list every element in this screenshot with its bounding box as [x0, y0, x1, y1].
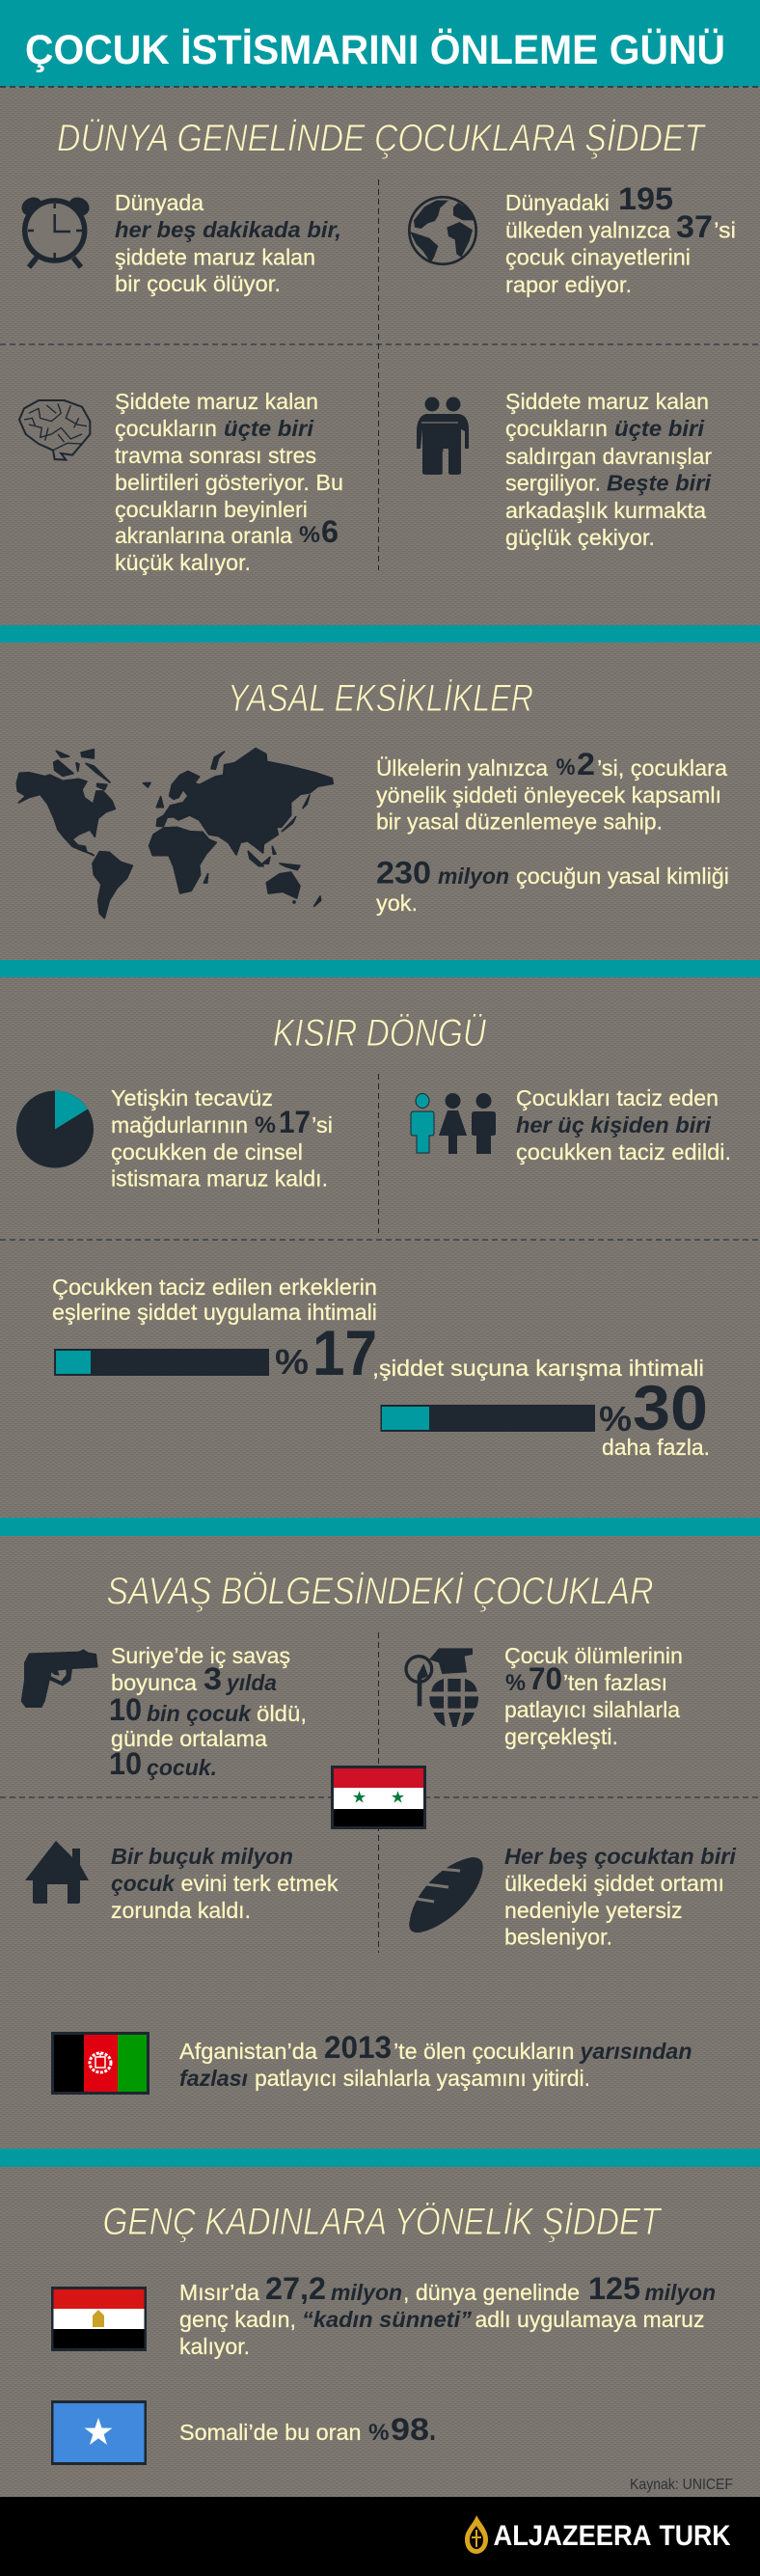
- text: Syria deaths: yılda: [226, 1670, 277, 1695]
- text: explosive weapons: ’ten fazlası: [563, 1670, 667, 1695]
- icon: two friends: [417, 397, 469, 475]
- bar chart: 30 percent: 30: [633, 1372, 708, 1443]
- text: one of three abusers: [516, 1085, 731, 1165]
- panel: vicious cycle: [0, 1012, 760, 1460]
- text: legal regulation: [376, 747, 728, 834]
- text: rape victims: 17: [279, 1105, 311, 1139]
- text: malnutrition: ülkedeki şiddet ortamı: [504, 1871, 724, 1896]
- text: Egypt FGM: [179, 2271, 716, 2359]
- text: more: daha fazla.: [602, 1435, 710, 1460]
- text: 37 of 195 countries: Dünyadaki: [505, 190, 610, 215]
- bar chart: 30 percent: %: [599, 1399, 632, 1439]
- footer: [0, 2497, 760, 2576]
- text: explosive weapons: %: [505, 1670, 526, 1696]
- text: Syria deaths: 10: [109, 1746, 142, 1781]
- text: Syria deaths: bin çocuk: [147, 1701, 253, 1726]
- text: one third aggressive: üçte biri: [614, 416, 704, 441]
- pie chart 17 percent: [16, 1090, 94, 1167]
- text: one third aggressive: güçlük çekiyor.: [505, 525, 655, 550]
- text: explosive weapons: 70: [529, 1661, 562, 1696]
- text: 230 million: çocuğun yasal kimliği: [516, 863, 729, 889]
- icon: alarm clock: [18, 194, 93, 267]
- panel: legal gaps: [16, 677, 729, 918]
- text: abused men intro: Çocukken taciz edilen erkeklerin: [52, 1274, 377, 1300]
- flag: Somalia: [51, 2400, 147, 2465]
- header banner: [0, 0, 760, 87]
- text: Afghanistan deaths: Afganistan’da: [179, 2039, 318, 2064]
- panel: children in war zones: [0, 1571, 760, 2095]
- bar chart: 17 percent: %: [275, 1342, 309, 1382]
- text: Egypt FGM: genç kadın,: [179, 2307, 296, 2332]
- heading: vicious cycle: KISIR DÖNGÜ: [273, 1012, 487, 1055]
- flag: Afghanistan: [51, 2032, 149, 2095]
- text: 37 of 195 countries: rapor ediyor.: [505, 272, 632, 297]
- world map: [16, 749, 333, 918]
- text: one third trauma: çocukların: [115, 416, 217, 441]
- text: rape victims: çocukken de cinsel: [111, 1139, 303, 1165]
- text: one third aggressive: sergiliyor.: [505, 471, 601, 496]
- text: displaced children: çocuk: [111, 1871, 176, 1896]
- flag: Syria: [331, 1766, 426, 1829]
- heading: young women: GENÇ KADINLARA YÖNELİK ŞİDDET: [102, 2201, 663, 2243]
- text: one third trauma: 6: [321, 514, 339, 549]
- text: one third trauma: %: [299, 522, 320, 548]
- band: section divider 3: [0, 1518, 760, 1536]
- text: legal regulation: %: [556, 754, 575, 781]
- text: 37 of 195 countries: çocuk cinayetlerini: [505, 245, 691, 270]
- text: Syria deaths: 10: [109, 1692, 142, 1727]
- text: Egypt FGM: adlı uygulamaya maruz: [475, 2307, 704, 2332]
- text: malnutrition: besleniyor.: [504, 1924, 612, 1949]
- logo: Al Jazeera Turk: ALJAZEERA: [494, 2520, 652, 2552]
- text: Egypt FGM: 27,2: [265, 2271, 326, 2306]
- text: one third aggressive: çocukların: [505, 416, 608, 441]
- icon: pistol: [21, 1649, 98, 1708]
- text: Syria deaths: Suriye’de iç savaş: [111, 1643, 290, 1668]
- text: one of three abusers: çocukken taciz edildi.: [516, 1139, 731, 1165]
- icon: globe: [409, 197, 476, 264]
- source note: Kaynak: UNICEF: [630, 2477, 733, 2493]
- text: rape victims: %: [255, 1112, 276, 1138]
- text: Egypt FGM: 125: [588, 2271, 640, 2306]
- text: Somalia rate: [179, 2412, 436, 2447]
- text: Egypt FGM: milyon: [644, 2280, 716, 2305]
- panel: violence against young women: [51, 2201, 733, 2493]
- text: explosive weapons: patlayıcı silahlarla: [504, 1697, 681, 1722]
- text: legal regulation: bir yasal düzenlemeye sahip.: [376, 808, 663, 834]
- text: Afghanistan deaths: fazlası: [179, 2066, 248, 2091]
- text: Syria deaths: öldü,: [257, 1701, 307, 1726]
- icon: three people: [411, 1093, 496, 1154]
- text: one third trauma: Şiddete maruz kalan: [115, 389, 318, 414]
- text: Afghanistan deaths: 2013: [324, 2030, 392, 2065]
- text: every five minutes: bir çocuk ölüyor.: [115, 271, 281, 296]
- text: rape victims: mağdurlarının: [111, 1112, 248, 1137]
- text: abused men intro: [52, 1274, 377, 1325]
- icon: brain: [19, 400, 90, 460]
- text: legal regulation: yönelik şiddeti önleyecek kapsamlı: [376, 782, 721, 808]
- text: Somalia rate: Somali’de bu oran: [179, 2420, 361, 2445]
- band: section divider 4: [0, 2149, 760, 2167]
- icon: grenade: [406, 1648, 478, 1727]
- text: displaced children: Bir buçuk milyon: [111, 1844, 293, 1869]
- text: Somalia rate: %: [368, 2420, 390, 2446]
- text: every five minutes: her beş dakikada bir,: [115, 217, 341, 242]
- logo: Al Jazeera Turk: [465, 2515, 731, 2554]
- text: 230 million: 230: [376, 855, 431, 890]
- text: every five minutes: şiddete maruz kalan: [115, 245, 315, 270]
- heading: legal gaps: YASAL EKSİKLİKLER: [228, 677, 533, 720]
- text: legal regulation: Ülkelerin yalnızca: [376, 755, 549, 781]
- text: one of three abusers: her üç kişiden biri: [516, 1112, 711, 1137]
- text: one third aggressive: Şiddete maruz kalan: [505, 389, 709, 414]
- text: Syria deaths: 3: [204, 1661, 222, 1696]
- flag: Syria: ★: [391, 1789, 405, 1808]
- logo: Al Jazeera Turk: TURK: [660, 2520, 731, 2552]
- text: displaced children: zorunda kaldı.: [111, 1898, 251, 1923]
- text: rape victims: [111, 1085, 333, 1191]
- text: 37 of 195 countries: 195: [618, 181, 673, 216]
- text: one third trauma: akranlarına oranla: [115, 523, 293, 548]
- text: Egypt FGM: milyon: [331, 2280, 402, 2305]
- text: every five minutes: Dünyada: [115, 190, 204, 215]
- text: malnutrition: [504, 1844, 736, 1949]
- text: Afghanistan deaths: [179, 2030, 692, 2091]
- text: rape victims: ’si: [312, 1112, 333, 1137]
- title: ÇOCUK İSTİSMARINI ÖNLEME GÜNÜ: [25, 27, 725, 73]
- text: one third aggressive: arkadaşlık kurmakta: [505, 498, 707, 523]
- text: malnutrition: nedeniyle yetersiz: [504, 1898, 683, 1923]
- text: one of three abusers: Çocukları taciz eden: [516, 1085, 719, 1110]
- text: displaced children: evini terk etmek: [181, 1871, 339, 1896]
- text: legal regulation: 2: [577, 747, 595, 781]
- text: one third aggressive: saldırgan davranışlar: [505, 444, 712, 469]
- text: Syria deaths: [109, 1643, 307, 1781]
- flag: Syria: ★: [352, 1789, 366, 1808]
- text: Syria deaths: çocuk.: [147, 1755, 217, 1780]
- text: 230 million: yok.: [376, 891, 418, 916]
- text: one third trauma: çocukların beyinleri: [115, 497, 308, 522]
- panel: world violence against children: [0, 118, 760, 575]
- text: explosive weapons: [504, 1643, 683, 1749]
- text: one third aggressive: Beşte biri: [607, 471, 711, 496]
- text: one third trauma: [115, 389, 343, 575]
- text: displaced children: [111, 1844, 339, 1923]
- bar chart: 30 percent: [380, 1372, 708, 1443]
- band: section divider 1: [0, 625, 760, 643]
- text: rape victims: istismara maruz kaldı.: [111, 1165, 328, 1191]
- text: Somalia rate: 98: [391, 2412, 429, 2447]
- text: Afghanistan deaths: ’te ölen çocukların: [394, 2039, 575, 2064]
- text: explosive weapons: gerçekleşti.: [504, 1724, 618, 1749]
- text: Somalia rate: .: [429, 2412, 436, 2447]
- text: 37 of 195 countries: 37: [676, 209, 713, 244]
- text: one third aggressive: [505, 389, 712, 550]
- text: Egypt FGM: “kadın sünneti”: [302, 2307, 472, 2332]
- text: Afghanistan deaths: yarısından: [580, 2039, 692, 2064]
- text: Egypt FGM: Mısır’da: [179, 2280, 260, 2305]
- text: Syria deaths: boyunca: [111, 1670, 198, 1695]
- text: legal regulation: ’si, çocuklara: [597, 755, 728, 781]
- text: 37 of 195 countries: ’si: [714, 218, 736, 243]
- text: 37 of 195 countries: ülkeden yalnızca: [505, 218, 671, 243]
- text: 37 of 195 countries: [505, 181, 736, 297]
- text: malnutrition: Her beş çocuktan biri: [504, 1844, 736, 1869]
- bar chart: 17 percent: 17: [312, 1317, 377, 1388]
- text: explosive weapons: Çocuk ölümlerinin: [504, 1643, 683, 1668]
- text: 230 million: [376, 855, 729, 916]
- text: rape victims: Yetişkin tecavüz: [111, 1085, 273, 1110]
- text: crime involvement: ,şiddet suçuna karışma ihtimali: [372, 1356, 704, 1381]
- text: one third trauma: belirtileri gösteriyor. Bu: [115, 470, 343, 495]
- icon: bread: [409, 1857, 483, 1932]
- bar chart: 17 percent: [54, 1317, 377, 1388]
- text: Syria deaths: günde ortalama: [111, 1726, 268, 1751]
- flag: Egypt: [51, 2287, 147, 2351]
- text: one third trauma: üçte biri: [224, 416, 313, 441]
- text: every five minutes: [115, 190, 341, 296]
- band: section divider 2: [0, 960, 760, 977]
- heading: war zones: SAVAŞ BÖLGESİNDEKİ ÇOCUKLAR: [106, 1571, 654, 1613]
- text: one third trauma: travma sonrası stres: [115, 443, 316, 468]
- text: Egypt FGM: , dünya genelinde: [403, 2280, 580, 2305]
- text: one third trauma: küçük kalıyor.: [115, 550, 251, 575]
- text: Egypt FGM: kalıyor.: [179, 2334, 250, 2359]
- text: abused men intro: eşlerine şiddet uygulama ihtimali: [52, 1300, 377, 1325]
- text: 230 million: milyon: [438, 863, 509, 889]
- text: Afghanistan deaths: patlayıcı silahlarla yaşamını yitirdi.: [255, 2066, 590, 2091]
- icon: house: [25, 1841, 89, 1904]
